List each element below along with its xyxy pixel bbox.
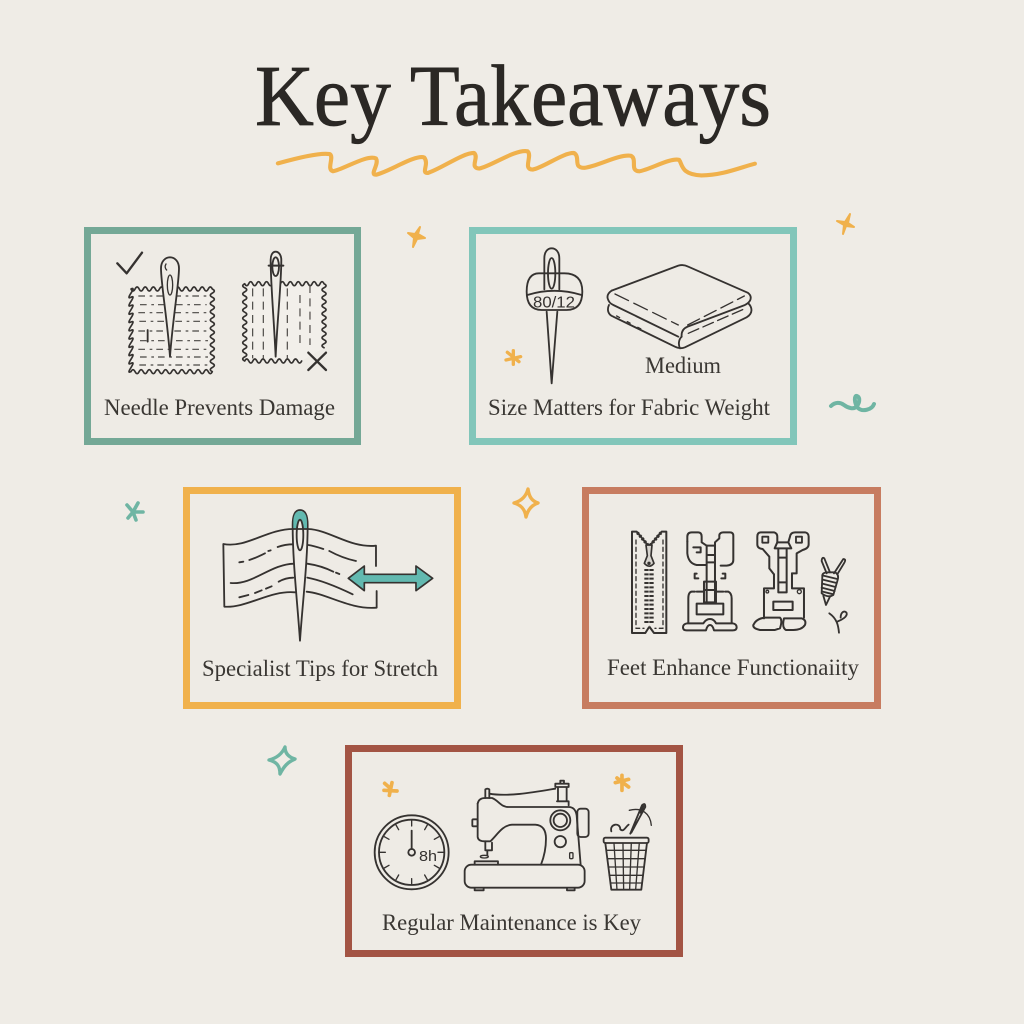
sparkle: teal squiggle right [831,396,874,410]
label: Regular Maintenance is Key [382,910,641,935]
panel: feet enhance functionality [586,490,878,706]
icon: waste basket with needle [604,804,651,890]
title underline squiggle [278,151,755,175]
icon: clock showing 8h [375,815,449,889]
label: Needle Prevents Damage [104,395,335,420]
panel: specialist tips for stretch [186,490,458,706]
icon: sewing machine [465,781,589,890]
icon: bobbin and thread [822,558,847,633]
icon: gold star right [615,775,629,790]
icon: presser foot two [753,532,809,630]
sparkle: teal four point star [269,747,295,774]
sparkle: gold star top right [837,214,854,234]
sparkle: gold four point star [514,489,538,517]
sparkle: gold star in size panel [506,351,521,364]
sublabel: medium: Medium [645,353,721,378]
panel: size matters for fabric weight [472,230,794,442]
icon: needle with size badge: 80/12 [533,294,575,311]
icon: stretch fabric with needle [223,529,377,608]
panel: needle prevents damage [88,230,358,442]
sparkle: gold star top centre [408,227,425,247]
label: Size Matters for Fabric Weight [488,395,771,420]
icon: clock showing 8h: 8h [419,849,437,865]
icon: needle with size badge [527,248,582,383]
icon: wrong needle on damaged fabric [243,252,326,370]
icon: presser foot one [683,532,737,630]
icon: folded fabric [607,265,751,348]
icon: two way stretch arrow [348,566,433,591]
sparkle: teal asterisk left [127,503,143,520]
icon: correct needle on intact fabric [117,253,214,374]
icon: gold star left [384,783,397,795]
panel: regular maintenance is key [348,748,680,954]
icon: ball point needle [293,510,308,641]
label: Feet Enhance Functionaiity [607,655,859,680]
icon: zipper [632,532,666,633]
title: Key Takeaways [255,47,771,144]
label: Specialist Tips for Stretch [202,656,438,681]
